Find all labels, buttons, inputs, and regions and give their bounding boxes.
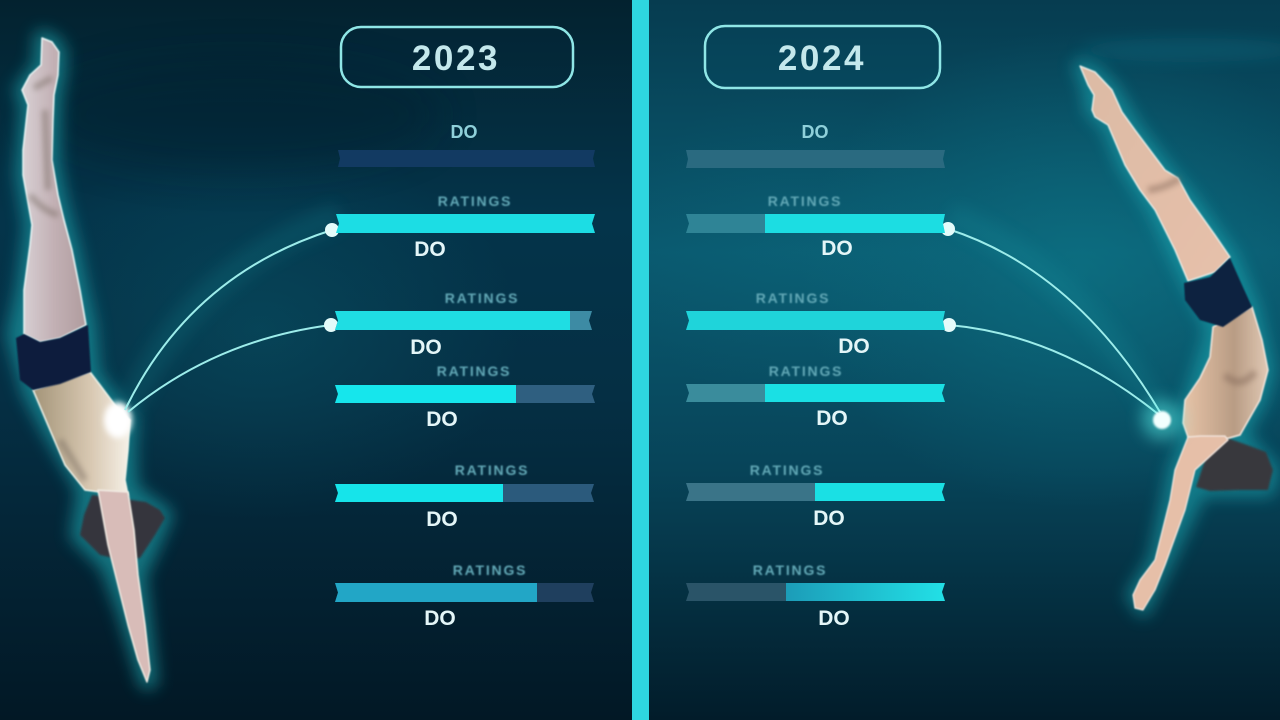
row 6: DO <box>424 607 456 630</box>
row 4: RATINGS <box>437 363 511 379</box>
right diver trunks <box>1184 258 1252 327</box>
row 2 <box>686 193 945 260</box>
node: lower 2023 <box>324 318 338 332</box>
row 4: DO <box>816 407 848 430</box>
row 2 <box>336 193 595 261</box>
right diver arm <box>1133 436 1228 610</box>
row 6: RATINGS <box>453 562 527 578</box>
panel: 2023 background <box>0 0 640 720</box>
row 1 <box>338 122 595 167</box>
node: top 2023 <box>325 223 339 237</box>
row 6: RATINGS <box>753 562 827 578</box>
left diver legs <box>22 38 86 342</box>
row 2: RATINGS <box>768 193 842 209</box>
row 3: RATINGS <box>445 290 519 306</box>
row 3: DO <box>410 336 442 359</box>
row 5: DO <box>813 507 845 530</box>
row 4 <box>335 363 595 431</box>
row 3: DO <box>838 335 870 358</box>
row 3 <box>335 290 592 359</box>
background glow <box>0 30 1280 520</box>
row 1: DO <box>450 122 478 142</box>
left diver shading <box>30 78 85 480</box>
row 6: DO <box>818 607 850 630</box>
row 5 <box>335 462 594 531</box>
left diver head <box>80 495 165 560</box>
diver: 2023 side <box>14 38 165 682</box>
panel: 2024 background <box>640 0 1280 720</box>
right diver legs <box>1080 66 1230 281</box>
year pill 2024: 2024 <box>778 39 866 78</box>
row 5: RATINGS <box>455 462 529 478</box>
year pill 2024 <box>705 26 940 88</box>
row 3 <box>686 290 945 358</box>
right diver head <box>1196 436 1273 491</box>
row 6 <box>686 562 945 630</box>
left diver trunks <box>16 325 91 390</box>
row 4: RATINGS <box>769 363 843 379</box>
row 2: DO <box>821 237 853 260</box>
row 5: DO <box>426 508 458 531</box>
node: origin 2024 <box>1142 400 1182 440</box>
diver: 2024 side <box>1080 66 1273 610</box>
panel: 2024 chart <box>686 26 945 630</box>
connector curves: 2023 <box>125 223 339 412</box>
node: lower 2024 <box>942 318 956 332</box>
row 2: DO <box>414 238 446 261</box>
row 1 <box>686 122 945 168</box>
row 1: DO <box>802 122 828 142</box>
row 4 <box>686 363 945 430</box>
connector curves: 2024 <box>941 222 1182 440</box>
left diver torso <box>33 372 130 495</box>
row 5: RATINGS <box>750 462 824 478</box>
row 4: DO <box>426 408 458 431</box>
row 6 <box>335 562 594 630</box>
node: top 2024 <box>941 222 955 236</box>
right diver shading <box>1148 178 1255 382</box>
left diver arm <box>98 490 150 682</box>
right diver torso <box>1183 307 1268 445</box>
year pill 2023 <box>341 27 573 87</box>
row 2: RATINGS <box>438 193 512 209</box>
panel: 2023 chart <box>335 27 595 630</box>
row 5 <box>686 462 945 530</box>
row 3: RATINGS <box>756 290 830 306</box>
center divider <box>632 0 649 720</box>
year pill 2023: 2023 <box>412 39 500 78</box>
